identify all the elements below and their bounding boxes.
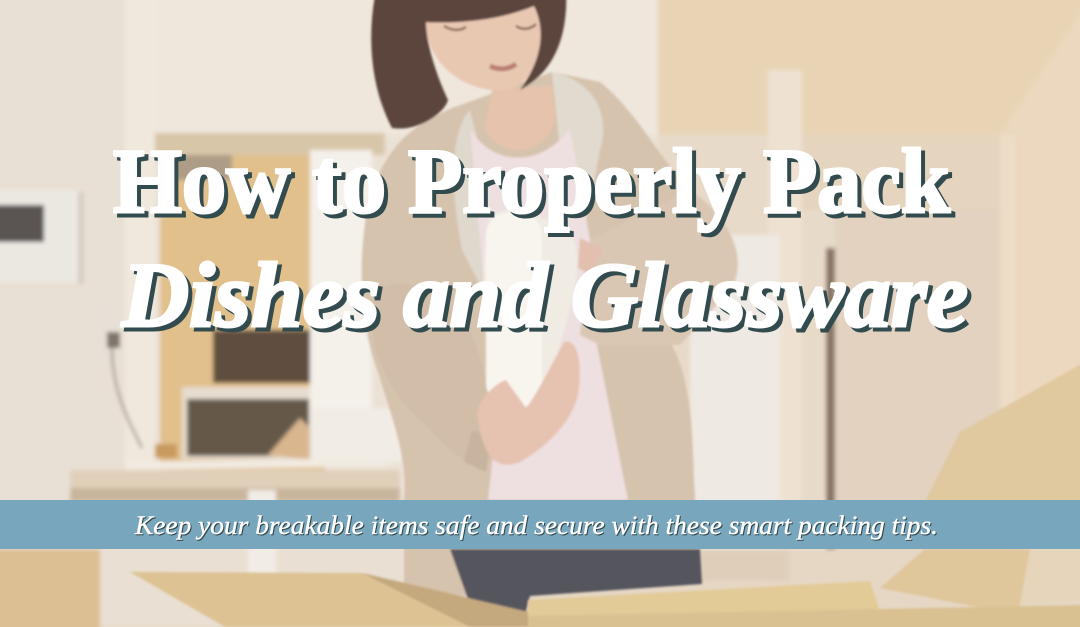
hand xyxy=(478,342,580,465)
cardboard box xyxy=(130,362,1080,627)
photo subject: woman holding plates xyxy=(362,0,738,615)
right sleeve xyxy=(580,190,738,345)
plates xyxy=(484,211,577,410)
fridge xyxy=(310,150,372,410)
subtitle band xyxy=(0,500,1080,549)
neck and face xyxy=(484,85,556,150)
lower room xyxy=(0,549,1080,627)
title line 1: How to Properly Pack: How to Properly Pack xyxy=(117,134,955,236)
title xyxy=(113,130,972,350)
shirt xyxy=(470,128,628,500)
intercom panel xyxy=(78,192,84,284)
hoodie body xyxy=(362,72,735,596)
hoodie collar lining xyxy=(454,110,488,300)
jeans xyxy=(450,549,702,615)
ceiling and right wall xyxy=(658,0,1080,135)
left sleeve xyxy=(372,284,500,470)
counter xyxy=(125,458,396,470)
title line 1: How to Properly Pack: How to Properly Pack xyxy=(113,130,951,232)
hair xyxy=(371,0,528,129)
wall outlet and cable xyxy=(94,302,116,364)
title line 2: Dishes and Glassware: Dishes and Glassware xyxy=(125,248,972,350)
subtitle text: Keep your breakable items safe and secure with these smart packing tips. xyxy=(135,512,939,541)
alcove xyxy=(155,133,385,155)
subtitle text: Keep your breakable items safe and secure with these smart packing tips. xyxy=(134,511,938,540)
title line 2: Dishes and Glassware: Dishes and Glassware xyxy=(121,244,968,346)
eyes, nose and lips xyxy=(444,24,536,69)
